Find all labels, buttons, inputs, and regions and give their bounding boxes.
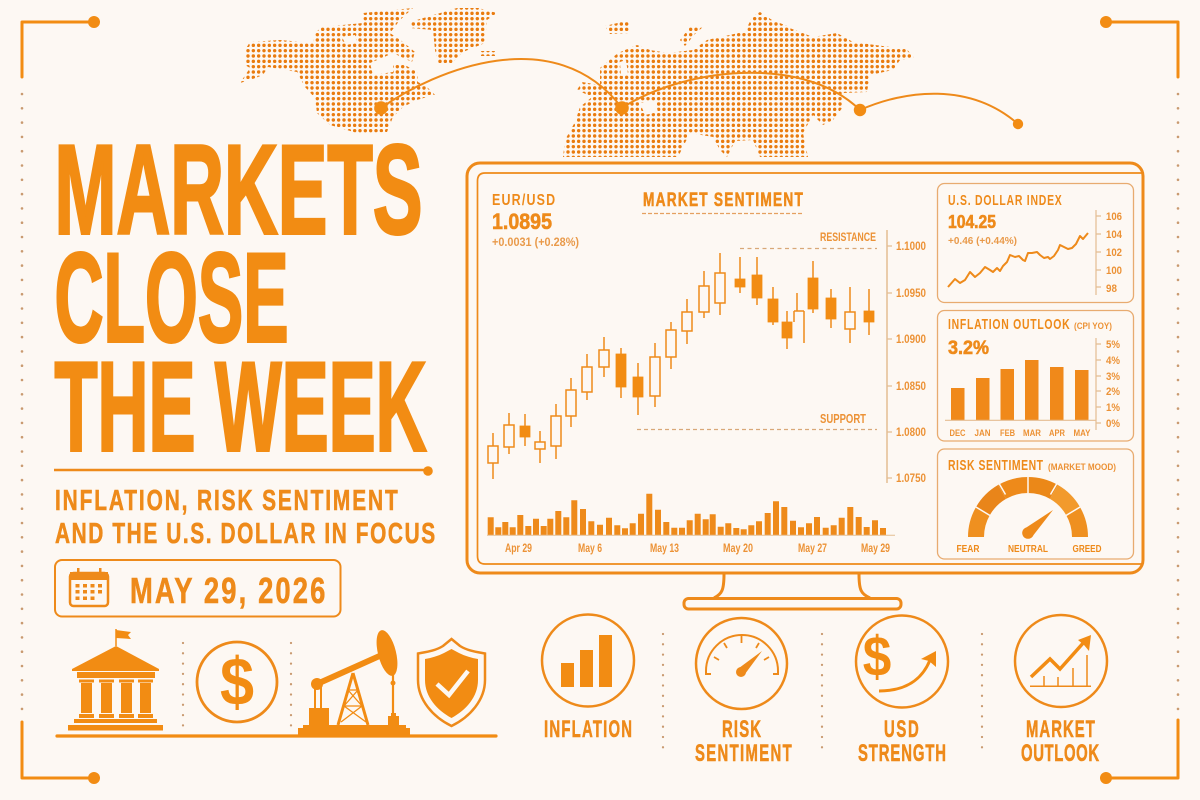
ground line (57, 734, 496, 738)
EUR/USD readout: EUR/USD (492, 192, 555, 209)
bar chart: MAR (1023, 428, 1041, 439)
bar chart: APR (1049, 428, 1065, 439)
dotted separators (183, 634, 982, 756)
axis: 104 (1106, 229, 1123, 241)
panel: U.S. dollar index: U.S. DOLLAR INDEX (948, 192, 1062, 208)
label: risk sentiment: RISK (722, 717, 761, 743)
bar chart: FEB (1000, 428, 1015, 439)
resistance level (740, 232, 877, 248)
icon: risk gauge (696, 618, 787, 709)
title rule (54, 466, 433, 476)
label: USD strength: USD (884, 717, 919, 743)
gauge (976, 476, 1080, 539)
price axis: 1.0900 (896, 332, 926, 346)
date labels: May 13 (650, 543, 679, 555)
title: THE WEEK (54, 336, 426, 478)
percent axis: 4% (1106, 355, 1120, 367)
EUR/USD readout: +0.0031 (+0.28%) (492, 237, 579, 249)
line chart (948, 233, 1088, 287)
icon: market outlook (1015, 615, 1107, 707)
icon: USD strength: $ (863, 626, 891, 689)
icon: calendar (70, 568, 108, 606)
panel: inflation outlook (938, 310, 1134, 441)
panel: inflation outlook: (CPI YOY) (1074, 321, 1112, 331)
percent axis (1096, 338, 1120, 430)
subtitle (55, 485, 435, 550)
panel: U.S. dollar index (938, 184, 1134, 302)
panel: risk sentiment: NEUTRAL (1008, 543, 1048, 555)
icon: inflation (542, 614, 634, 706)
route arcs with location markers (374, 59, 1023, 129)
axis: 106 (1106, 211, 1122, 223)
monitor stand (684, 574, 901, 609)
icon: oil pump jack (298, 628, 410, 736)
bar chart: JAN (974, 428, 991, 439)
date labels: May 27 (798, 543, 827, 555)
icon: dollar coin (197, 642, 277, 722)
axis (1096, 210, 1123, 295)
axis: 102 (1106, 247, 1122, 259)
axis: 100 (1106, 265, 1122, 277)
panel: risk sentiment: RISK SENTIMENT (948, 457, 1043, 473)
label: market outlook: MARKET (1026, 717, 1095, 743)
label: market outlook (1021, 717, 1100, 767)
bar chart (945, 360, 1096, 439)
panel: U.S. dollar index: +0.46 (+0.44%) (948, 235, 1017, 247)
label: USD strength: STRENGTH (858, 741, 946, 767)
percent axis: 5% (1106, 339, 1120, 351)
heading: market sentiment: MARKET SENTIMENT (643, 189, 803, 211)
price axis (887, 230, 926, 485)
price axis: 1.0800 (896, 425, 926, 439)
price axis: 1.1000 (896, 239, 926, 253)
date labels: Apr 29 (505, 543, 532, 555)
subtitle: AND THE U.S. DOLLAR IN FOCUS (55, 518, 435, 550)
icon: bank building (68, 629, 163, 730)
bar chart: MAY (1074, 428, 1091, 439)
date box (55, 560, 340, 616)
panel: inflation outlook: 3.2% (948, 338, 989, 359)
price axis: 1.0750 (896, 471, 926, 485)
percent axis: 1% (1106, 402, 1120, 414)
label: risk sentiment (695, 717, 792, 767)
bar chart: DEC (950, 428, 966, 439)
subtitle: INFLATION, RISK SENTIMENT (55, 485, 398, 517)
icon: USD strength (856, 616, 948, 708)
panel: inflation outlook: INFLATION OUTLOOK (948, 316, 1070, 332)
date labels: May 29 (861, 543, 890, 555)
panel: EUR/USD chart (487, 189, 926, 555)
candlestick chart (488, 253, 874, 479)
title: MARKETS (54, 118, 422, 260)
resistance level: RESISTANCE (820, 232, 876, 244)
panel: risk sentiment: (MARKET MOOD) (1048, 462, 1116, 472)
percent axis: 3% (1106, 371, 1120, 383)
panel: U.S. dollar index: 104.25 (948, 212, 996, 232)
date labels: May 6 (578, 543, 602, 555)
monitor frame (467, 163, 1143, 609)
icon: dollar coin: $ (220, 643, 254, 720)
dotted world map (240, 8, 915, 157)
support level: SUPPORT (820, 411, 866, 426)
percent axis: 2% (1106, 386, 1120, 398)
panel: risk sentiment: FEAR (956, 543, 980, 555)
volume bars (487, 494, 895, 535)
date box: MAY 29, 2026 (130, 570, 325, 611)
label: risk sentiment: SENTIMENT (695, 741, 792, 767)
icon: shield with check (418, 639, 485, 726)
percent axis: 0% (1106, 418, 1120, 430)
panel: risk sentiment (938, 449, 1134, 559)
axis: 98 (1106, 283, 1117, 295)
title: CLOSE (54, 226, 288, 368)
label: inflation: INFLATION (544, 717, 632, 743)
price axis: 1.0850 (896, 379, 926, 393)
EUR/USD readout: 1.0895 (492, 209, 552, 234)
title (54, 118, 426, 478)
date labels: May 20 (723, 543, 753, 555)
panel: risk sentiment: GREED (1072, 543, 1102, 555)
price axis: 1.0950 (896, 286, 926, 300)
EUR/USD readout (492, 192, 579, 249)
label: USD strength (858, 717, 946, 767)
date labels (505, 543, 890, 555)
label: market outlook: OUTLOOK (1021, 741, 1100, 767)
